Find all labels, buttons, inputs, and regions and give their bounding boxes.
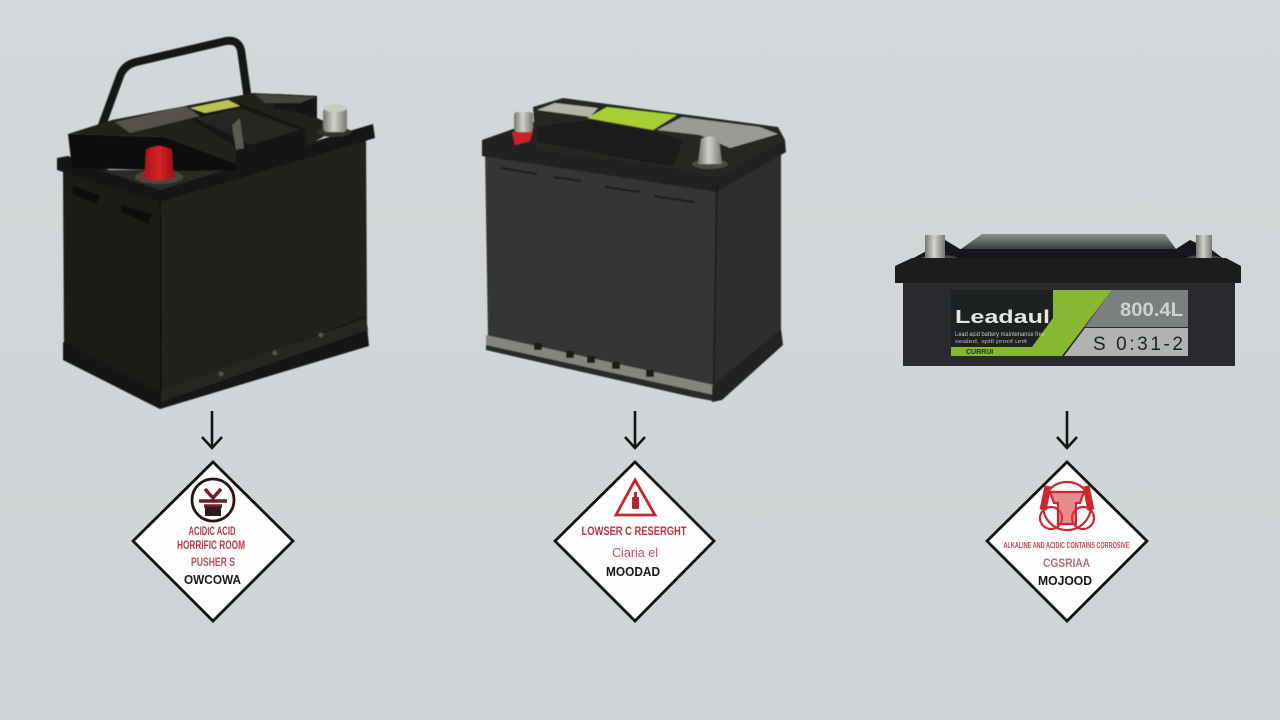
arrow 2	[625, 411, 645, 448]
green strip text: CURRUI	[966, 349, 993, 356]
top panel	[961, 234, 1176, 249]
body	[903, 283, 1235, 366]
top deck	[533, 98, 785, 178]
warning text: ALKALINE AND ACIDIC CONTAINS CORROSIVE	[1004, 541, 1130, 550]
icon: circled hazard symbol	[192, 479, 234, 521]
icon: biohazard symbol	[1040, 482, 1094, 530]
warning text: ACIDIC ACID	[188, 524, 236, 538]
arrow 3	[1057, 411, 1077, 448]
battery 3: low flat battery with green label	[895, 234, 1241, 366]
warning text: OWCOWA	[184, 572, 242, 587]
lid band	[895, 258, 1241, 283]
white label right	[657, 117, 778, 148]
handle	[101, 41, 248, 128]
silver terminal	[317, 104, 351, 137]
upper grey reading: 800.4L	[1120, 300, 1183, 321]
label: grey upper	[1085, 290, 1188, 327]
battery 3: low flat battery with green label: sealed, spill proof unit	[955, 339, 1028, 345]
warning text: CGSRIAA	[1043, 556, 1090, 570]
top rim	[482, 122, 786, 192]
white label left	[537, 103, 598, 117]
hazard diamond 2	[555, 462, 714, 621]
base lip	[486, 335, 714, 401]
red terminal	[512, 112, 533, 145]
left-front face	[485, 150, 717, 388]
warning text: MOJOOD	[1038, 573, 1092, 588]
warning text: LOWSER C RESERGHT	[582, 524, 687, 538]
warning text: Ciaria el	[612, 545, 658, 560]
deck behind the terminal	[100, 130, 356, 190]
arrow 1	[202, 411, 222, 448]
top deck	[68, 93, 340, 170]
label panel	[951, 290, 1071, 356]
battery 2: grey with green label	[482, 98, 786, 402]
center lid	[175, 103, 307, 170]
label: green stripe	[951, 290, 1112, 356]
vents	[501, 168, 694, 202]
warning text	[582, 524, 687, 579]
right terminal	[1186, 235, 1222, 263]
yellow label strip	[190, 100, 240, 113]
front face	[158, 134, 367, 395]
left terminal	[920, 235, 958, 263]
warning text: MOODAD	[606, 564, 660, 579]
brand text: Leadaul	[955, 307, 1050, 327]
side slots	[73, 186, 100, 204]
top right block	[273, 94, 317, 118]
red terminal	[135, 146, 183, 184]
warning text: HORRIFIC ROOM	[177, 538, 245, 552]
lower grey reading: S 0:31-2	[1093, 334, 1183, 355]
right side face	[712, 150, 781, 388]
warning text	[1004, 541, 1130, 588]
battery 1: black with handle and red terminal	[57, 41, 375, 409]
hazard diamond 1	[133, 462, 293, 621]
warning text	[177, 524, 245, 587]
lid block left	[68, 134, 237, 171]
icon: warning triangle	[616, 480, 655, 515]
center lid	[537, 120, 683, 167]
base skirt	[63, 316, 369, 409]
small label text: Lead acid battery maintenance free	[955, 332, 1046, 338]
green label	[587, 107, 677, 130]
left side face	[63, 165, 163, 408]
hazard diamond 3	[987, 462, 1147, 621]
rim	[57, 124, 375, 202]
warning text: PUSHER S	[191, 555, 235, 569]
label: grey lower	[1064, 328, 1188, 356]
silver terminal	[692, 136, 728, 169]
